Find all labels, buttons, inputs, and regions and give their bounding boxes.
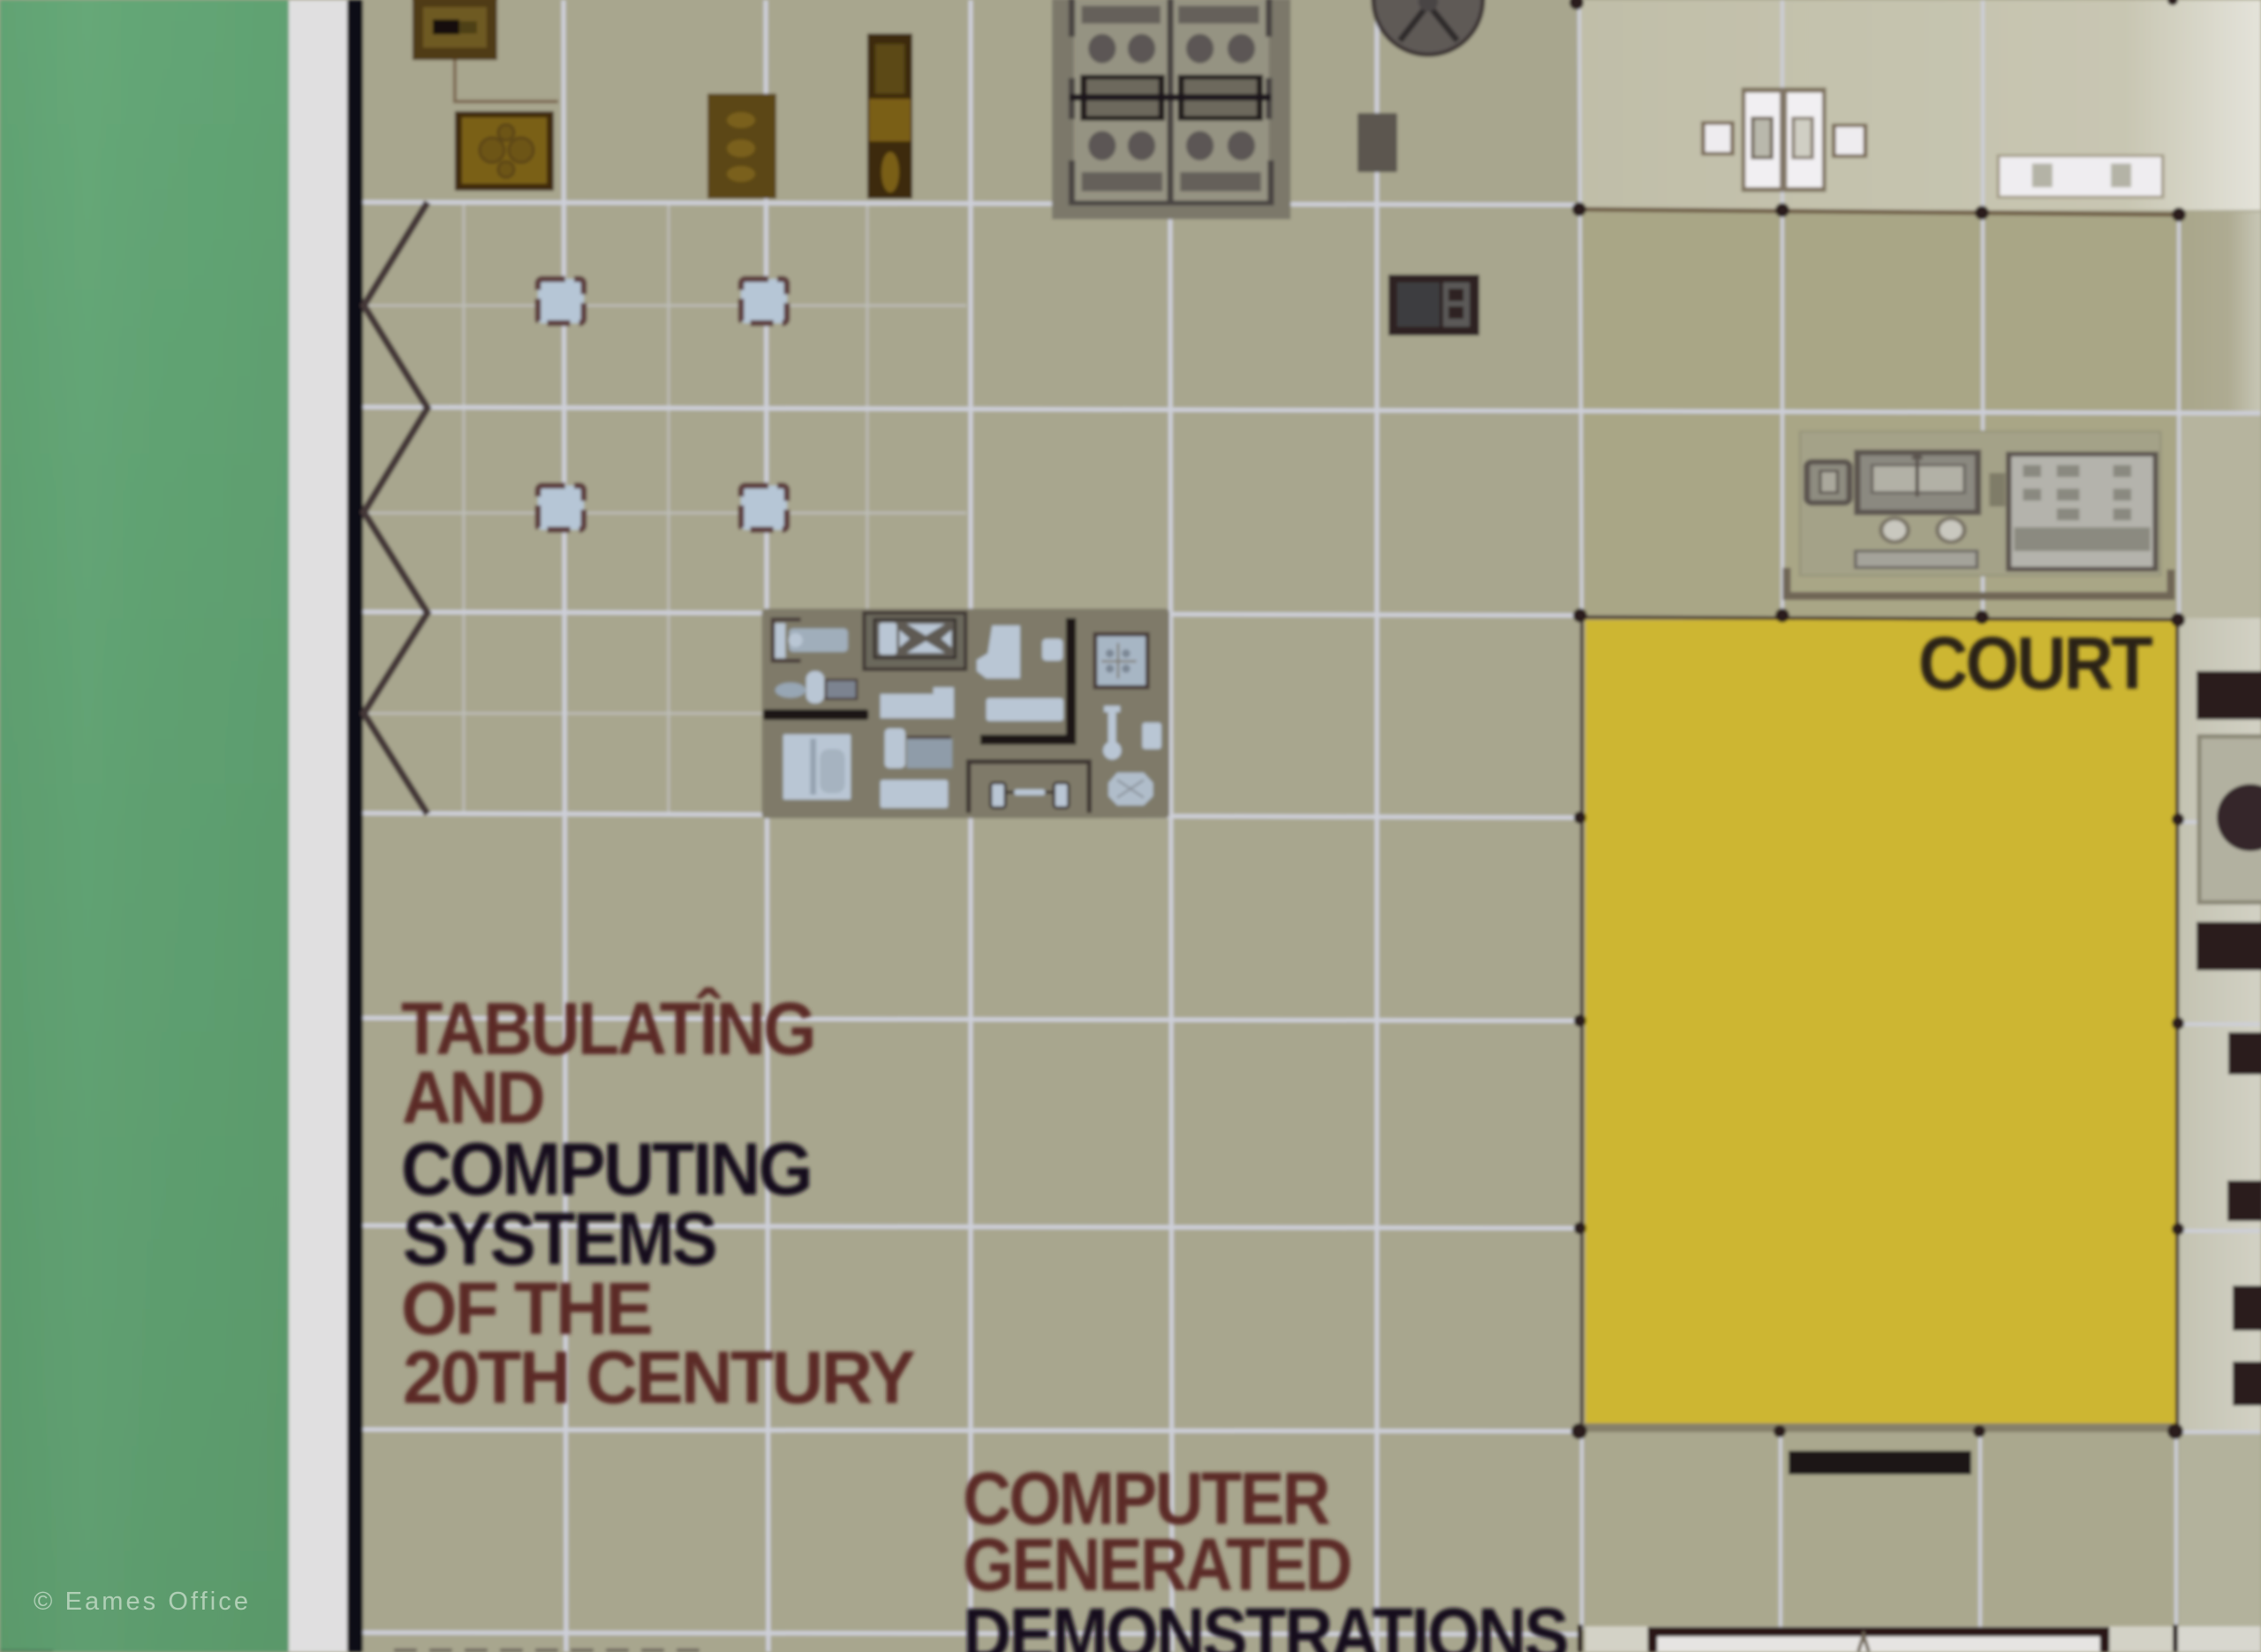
small grey rectangle: [1357, 113, 1397, 172]
heading: tabulating and computing systems of the 20th century: TABULATÎNG: [401, 987, 814, 1070]
clipped text tops at bottom left: [0, 1649, 712, 1652]
gold machine: tall column: [867, 34, 912, 199]
black wall line: [347, 0, 363, 1652]
heading: tabulating and computing systems of the 20th century: COMPUTING: [401, 1128, 811, 1211]
equipment group on platform: [1800, 432, 2160, 576]
heading: computer generated demonstrations: GENERATED: [963, 1523, 1350, 1606]
gold machine: three ovals: [707, 94, 776, 199]
heading: tabulating and computing systems of the 20th century: OF THE: [401, 1267, 651, 1350]
white bar machine: [1999, 155, 2163, 197]
bench below court: [1788, 1451, 1971, 1475]
heading: tabulating and computing systems of the 20th century: 20TH CENTURY: [403, 1336, 915, 1419]
gold machine: top box: [412, 0, 497, 60]
dark control box: [1388, 275, 1479, 336]
green side wall: [0, 0, 291, 1652]
right side wall blocks: [2197, 671, 2261, 1406]
zigzag partition: [364, 202, 427, 814]
court floor: [1582, 617, 2177, 1428]
column nodes: [1569, 0, 2186, 1439]
right side round unit: [2199, 736, 2261, 902]
platform bracket: [1787, 568, 2171, 596]
round wheel machine: [1373, 0, 1483, 55]
column markers: [538, 279, 787, 530]
white machine pair: [1703, 87, 1865, 192]
watermark: © Eames Office: [34, 1588, 248, 1616]
heading: tabulating and computing systems of the 20th century: [401, 987, 915, 1419]
line above court upper room: [1579, 209, 2179, 215]
gold machine: square with circles: [455, 111, 554, 191]
bottom room outline: [1577, 1625, 2261, 1652]
connector line: [455, 60, 558, 102]
heading: computer generated demonstrations: [963, 1457, 1567, 1652]
heading: computer generated demonstrations: COMPUTER: [963, 1457, 1329, 1540]
heading: tabulating and computing systems of the 20th century: AND: [402, 1056, 543, 1139]
heading: tabulating and computing systems of the 20th century: SYSTEMS: [403, 1197, 715, 1280]
grey panel machine with circles: [1052, 0, 1290, 219]
white strip: [289, 0, 349, 1652]
central machine cluster panel: [762, 608, 1169, 818]
label: court: COURT: [1918, 622, 2152, 705]
